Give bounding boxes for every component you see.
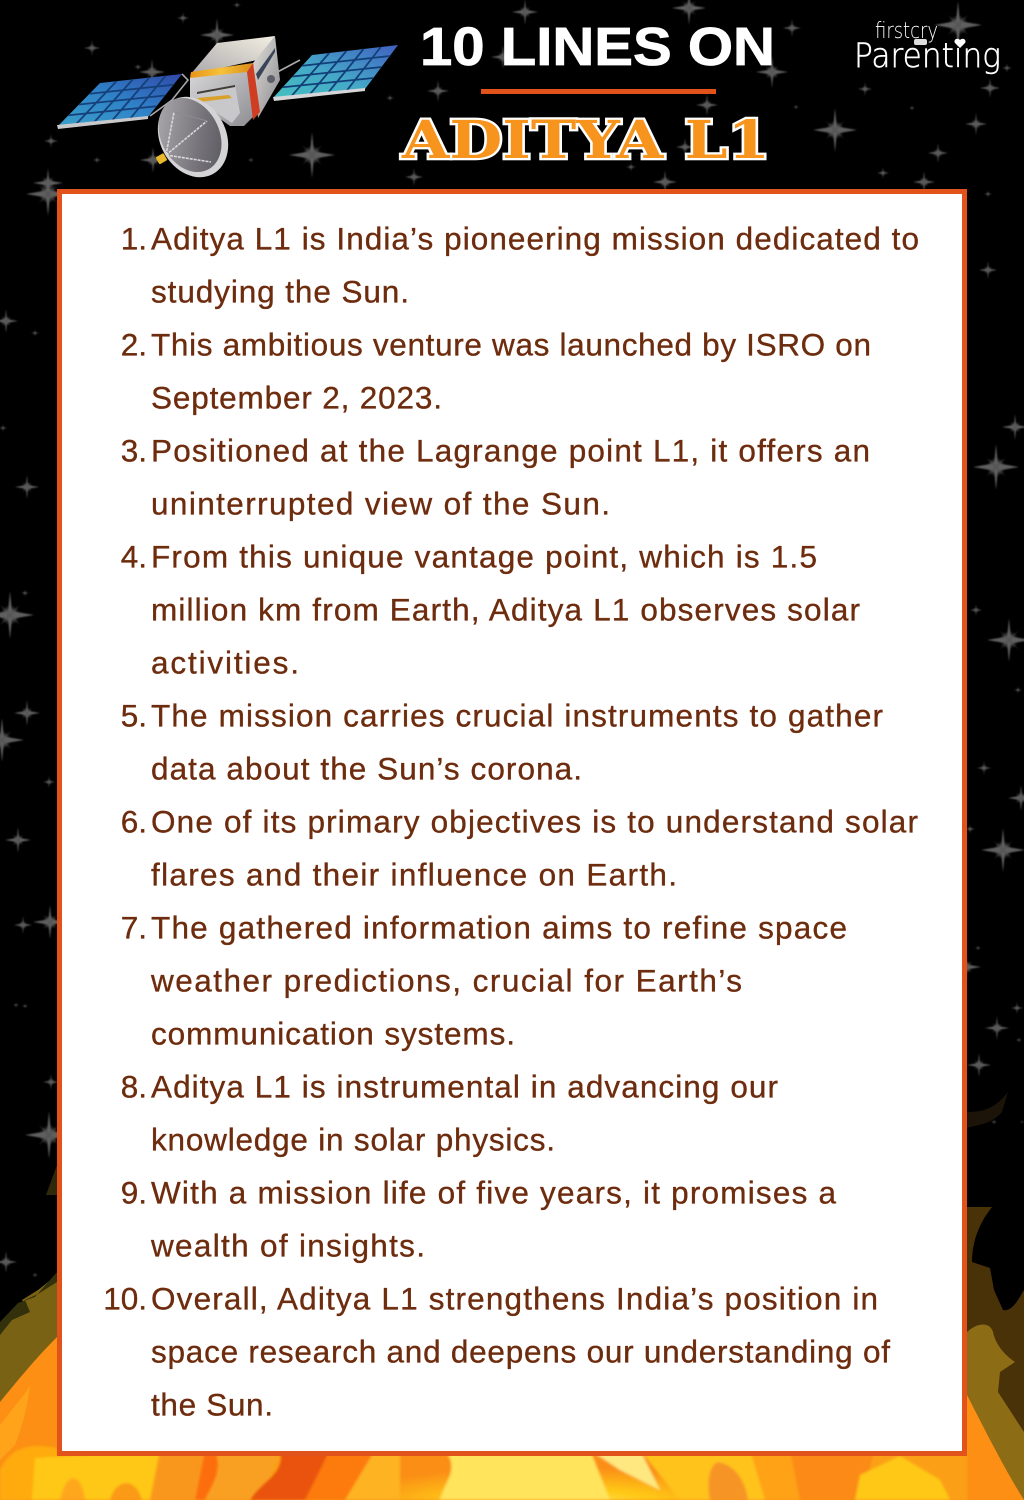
line 2 <box>121 326 871 416</box>
sun: dark left rim <box>0 1272 57 1335</box>
line 6: 6. <box>121 804 147 840</box>
line 1: 1. <box>121 220 147 256</box>
logo: FirstCry Parenting <box>854 19 1001 76</box>
title: 10 LINES ON: 10 LINES ON <box>420 17 775 77</box>
line 3 <box>121 432 870 522</box>
line 10 <box>103 1280 890 1422</box>
satellite illustration <box>57 36 398 190</box>
line 7: The gathered information aims to refine space <box>151 910 847 946</box>
sun: dim right corona <box>967 1207 1024 1500</box>
line 5: data about the Sun’s corona. <box>151 750 582 786</box>
panel: ten lines list <box>60 192 964 1454</box>
logo: .com badge <box>914 39 927 45</box>
satellite: dish antenna <box>144 84 242 190</box>
title underline <box>481 89 716 94</box>
line 7: 7. <box>121 910 147 946</box>
line 1 <box>121 220 919 310</box>
satellite: right solar panel <box>270 45 398 101</box>
line 10: 10. <box>103 1280 147 1316</box>
sun at the bottom of the page <box>0 1092 1024 1500</box>
logo: parenting wordmark: Parenting <box>854 36 1001 76</box>
sun: left swirl <box>0 1385 30 1460</box>
line 2: 2. <box>121 326 147 362</box>
sun: lower glow bands <box>0 1446 967 1500</box>
sun: dim left arc <box>0 1275 967 1500</box>
line 6: flares and their influence on Earth. <box>151 856 677 892</box>
panel frame <box>60 192 964 1454</box>
line 6: One of its primary objectives is to understand solar <box>151 804 918 840</box>
line 7 <box>121 910 847 1052</box>
sun: faint left flare <box>46 1165 57 1195</box>
line 10: Overall, Aditya L1 strengthens India’s position in <box>151 1280 878 1316</box>
line 8: knowledge in solar physics. <box>151 1122 555 1158</box>
line 10: space research and deepens our understanding of <box>151 1334 890 1370</box>
logo: firstcry wordmark: firstcry <box>875 19 938 44</box>
line 8: 8. <box>121 1068 147 1104</box>
line 6 <box>121 804 918 892</box>
sun: faint upper right arc <box>967 1092 1008 1128</box>
line 8 <box>121 1068 778 1158</box>
line 5: 5. <box>121 698 147 734</box>
line 7: communication systems. <box>151 1016 515 1052</box>
line 4: 4. <box>121 538 147 574</box>
line 4: From this unique vantage point, which is 1.5 <box>151 538 817 574</box>
line 4: activities. <box>151 644 299 680</box>
line 2: This ambitious venture was launched by ISRO on <box>151 326 871 362</box>
line 7: weather predictions, crucial for Earth’s <box>150 962 742 998</box>
line 9: 9. <box>121 1174 147 1210</box>
line 10: the Sun. <box>151 1386 273 1422</box>
line 8: Aditya L1 is instrumental in advancing our <box>151 1068 778 1104</box>
satellite: body <box>190 36 280 126</box>
line 4: million km from Earth, Aditya L1 observes solar <box>151 592 860 628</box>
line 5 <box>121 698 883 786</box>
satellite: left solar panel <box>57 74 188 129</box>
line 3: Positioned at the Lagrange point L1, it offers an <box>151 432 870 468</box>
line 4 <box>121 538 860 680</box>
line 1: Aditya L1 is India’s pioneering mission dedicated to <box>151 220 919 256</box>
title: ADITYA L1: ADITYA L1 <box>401 110 770 171</box>
line 9 <box>121 1174 836 1264</box>
line 2: September 2, 2023. <box>151 380 442 416</box>
line 3: uninterrupted view of the Sun. <box>151 486 610 522</box>
line 9: wealth of insights. <box>150 1228 425 1264</box>
sun: orange disc <box>0 1337 1024 1500</box>
line 9: With a mission life of five years, it promises a <box>151 1174 836 1210</box>
line 3: 3. <box>121 432 147 468</box>
logo: heart <box>954 39 966 48</box>
line 1: studying the Sun. <box>151 274 409 310</box>
sun: gold right flare <box>967 1324 1024 1500</box>
line 5: The mission carries crucial instruments to gather <box>151 698 883 734</box>
